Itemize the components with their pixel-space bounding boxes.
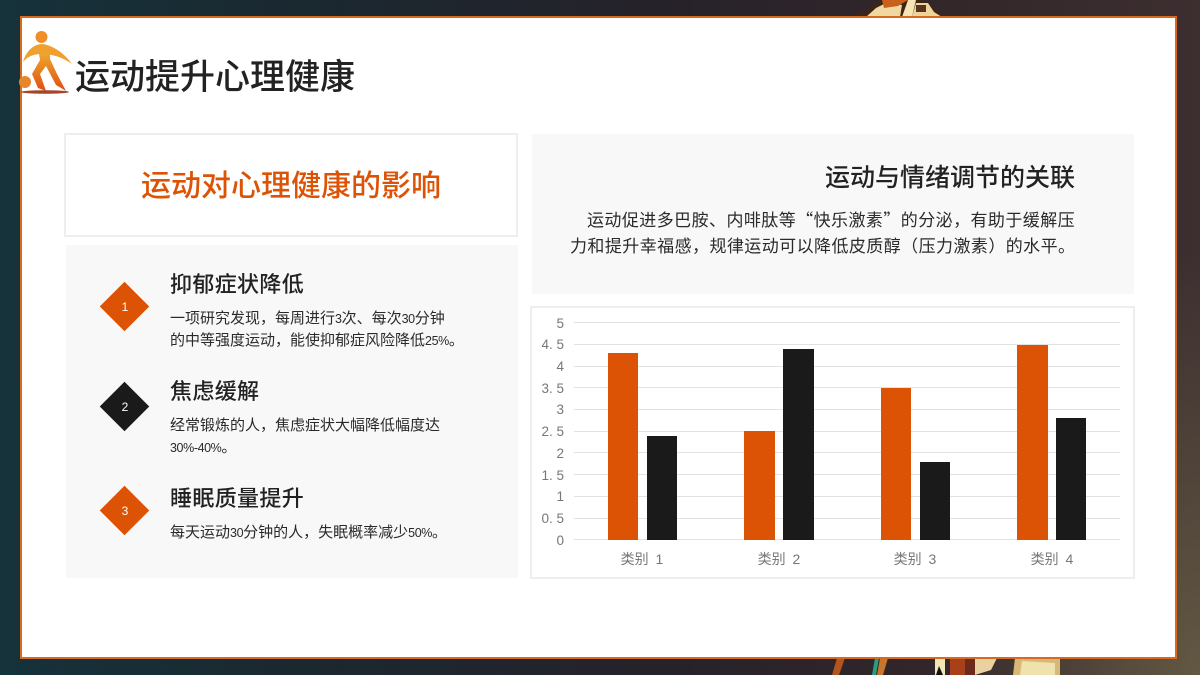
heading: sleep: 睡眠质量提升 [170,486,304,511]
y axis labels: 3. 5 [541,381,564,396]
y axis labels: 1 [556,489,564,504]
panel: three effects [66,245,518,578]
text: depression: 一项研究发现，每周进行3次、每次30分钟 [170,310,445,327]
heading: anxiety: 焦虑缓解 [170,379,259,404]
x axis labels: 类别 3 [894,551,937,567]
panel: emotion regulation [532,134,1134,294]
y axis labels: 5 [556,316,564,331]
y axis labels: 0. 5 [541,511,564,526]
x axis labels [621,551,1074,567]
y axis labels: 0 [556,533,564,548]
heading: depression: 抑郁症状降低 [170,272,304,297]
heading: emotion regulation: 运动与情绪调节的关联 [825,164,1075,192]
y axis labels: 4. 5 [541,337,564,352]
heading: impact on mental health: 运动对心理健康的影响 [141,170,441,203]
text: emotion regulation [570,206,1075,256]
icon: diamond 1 [100,282,149,331]
text: emotion regulation: 力和提升幸福感，规律运动可以降低皮质醇（压力激素）的水平。 [570,237,1075,256]
text: sleep: 每天运动30分钟的人，失眠概率减少50%。 [170,524,447,541]
text: emotion regulation: 运动促进多巴胺、内啡肽等“快乐激素”的分泌，有助于缓解压 [587,206,1075,231]
text: depression [170,310,464,349]
text: depression: 的中等强度运动，能使抑郁症风险降低25%。 [170,332,464,349]
x axis labels: 类别 4 [1031,551,1074,567]
number 3: 3 [122,504,128,518]
x axis labels: 类别 2 [758,551,801,567]
number 1: 1 [122,300,128,314]
icon: diamond 2 [100,382,149,431]
y axis labels [541,316,564,548]
orange series [608,345,1048,540]
icon: running figure logo [19,31,72,94]
icon: diamond 3 [100,486,149,535]
background figure: top [855,0,942,16]
background figure: bottom [832,659,1060,675]
text: anxiety: 经常锻炼的人，焦虑症状大幅降低幅度达 [170,417,440,434]
black series [647,349,1086,540]
panel: left heading [64,133,518,237]
x axis labels: 类别 1 [621,551,664,567]
y axis labels: 2 [556,446,564,461]
y axis labels: 2. 5 [541,424,564,439]
text: anxiety: 30%-40%。 [170,439,236,456]
text: anxiety [170,417,440,456]
y axis labels: 4 [556,359,564,374]
number 2: 2 [122,400,128,414]
title: 运动提升心理健康 [75,58,355,97]
y axis labels: 3 [556,402,564,417]
bar chart [530,306,1135,579]
y axis labels: 1. 5 [541,468,564,483]
